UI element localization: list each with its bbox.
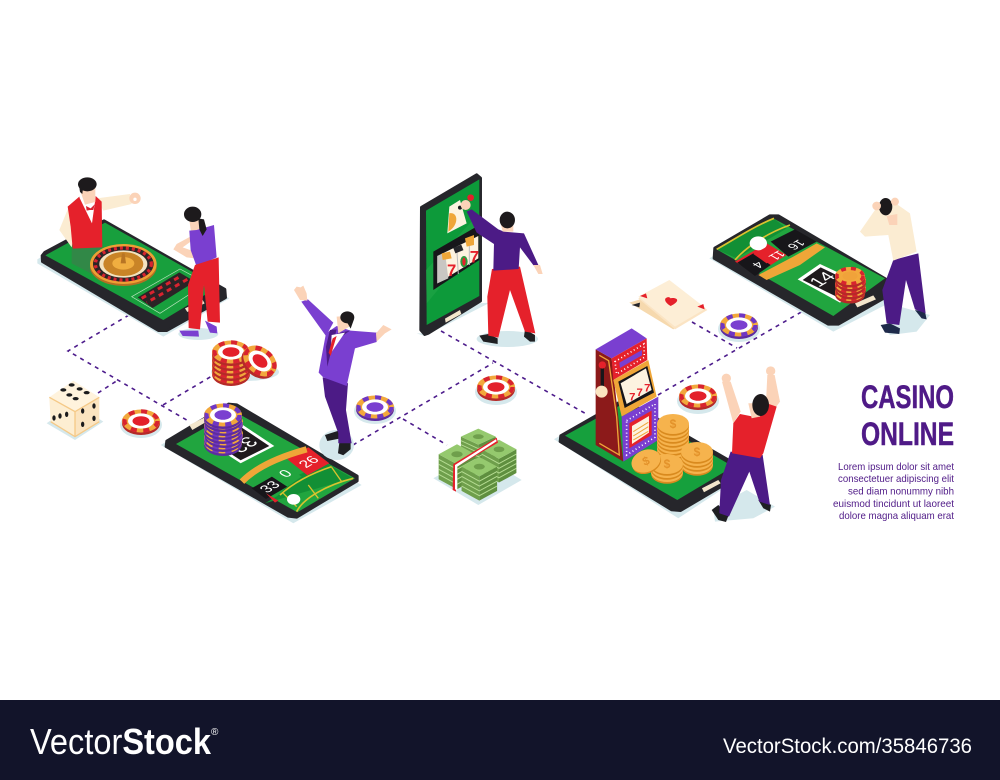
dice — [47, 381, 103, 440]
phone: roulette wheel with dealer — [37, 177, 229, 340]
phone body — [42, 221, 226, 331]
dashed connectors — [68, 311, 803, 445]
man in purple suit — [294, 286, 392, 460]
phone screen — [426, 179, 479, 325]
home button — [189, 417, 207, 430]
phone shadow — [709, 220, 902, 332]
coin stack front: $ — [664, 457, 671, 471]
description text — [833, 461, 954, 522]
roulette wheel — [90, 244, 157, 286]
registered mark: ® — [211, 727, 219, 738]
orange chip stack — [835, 267, 866, 304]
purple chip near cards — [718, 314, 760, 342]
phone: slot machine app with player — [417, 175, 543, 347]
number panel: 14 — [804, 269, 840, 290]
red chip — [475, 376, 517, 405]
roulette strip: 4 — [749, 259, 767, 270]
slot machine: 7 — [636, 387, 643, 399]
number panel: 33 — [224, 433, 262, 455]
leaning coin: $ — [640, 453, 652, 469]
phone body — [166, 404, 357, 517]
phone shadow — [554, 397, 749, 518]
phone shadow — [37, 220, 229, 337]
footer bar — [0, 700, 1000, 780]
roulette strip — [717, 218, 825, 280]
slot reels: 7 — [470, 248, 479, 267]
phone body — [714, 216, 897, 324]
phone shadow — [417, 303, 490, 336]
home button — [855, 295, 876, 307]
phone shadow — [161, 404, 362, 523]
description text: sed diam nonummy nibh — [848, 486, 954, 498]
coin tower: $ — [670, 417, 677, 431]
slot machine — [596, 328, 658, 462]
roulette strip: 16 — [784, 238, 808, 252]
footer id: VectorStock.com/35846736 — [723, 735, 972, 758]
gold coins — [628, 414, 713, 484]
woman player — [173, 207, 220, 340]
phone body — [421, 175, 481, 335]
footer logo: VectorStock — [30, 721, 212, 762]
number panel — [798, 264, 865, 303]
roulette strip — [242, 447, 353, 512]
roulette strip: 0 — [276, 468, 297, 480]
home button — [445, 310, 461, 323]
coin stack right: $ — [694, 445, 701, 459]
stacks of cash — [433, 429, 522, 505]
phone screen — [717, 218, 885, 316]
dealer reflection — [72, 247, 102, 277]
home button — [185, 300, 205, 312]
number panel — [206, 423, 274, 463]
phone screen — [45, 223, 219, 320]
phone: slot machine with coins and cheering man — [554, 397, 749, 518]
home button — [702, 480, 721, 492]
title: casino online — [861, 379, 954, 452]
slot reels: 7 — [447, 261, 456, 280]
phone: roulette table top right — [709, 216, 902, 332]
slot reels — [433, 225, 479, 290]
description text: Lorem ipsum dolor sit amet — [838, 461, 954, 473]
title: casino online: ONLINE — [861, 416, 954, 452]
phone body — [560, 400, 742, 511]
red chip near cheering man — [677, 384, 719, 414]
phone: roulette table with chips — [161, 403, 362, 523]
description text: euismod tincidunt ut laoreet — [833, 498, 954, 510]
single red chip — [120, 410, 162, 438]
man in purple shirt — [461, 194, 543, 347]
description text: consectetuer adipiscing elit — [838, 473, 954, 485]
roulette strip: 11 — [765, 249, 788, 262]
betting board — [132, 269, 207, 313]
description text: dolore magna aliquam erat — [839, 510, 954, 522]
cheering man — [712, 366, 780, 522]
title: casino online: CASINO — [861, 379, 954, 415]
purple chip stack — [204, 403, 243, 456]
phone screen — [565, 403, 733, 500]
playing cards — [629, 280, 707, 329]
worried man — [860, 198, 930, 335]
dealer — [59, 177, 141, 249]
slot lever card — [447, 200, 467, 233]
phone screen — [176, 411, 355, 512]
slot machine: 7 — [644, 382, 650, 394]
roulette strip: 26 — [296, 454, 323, 470]
slot machine: 7 — [629, 392, 635, 404]
chip stack pair — [211, 339, 283, 386]
purple chip — [354, 396, 396, 424]
roulette strip: 33 — [257, 479, 284, 495]
